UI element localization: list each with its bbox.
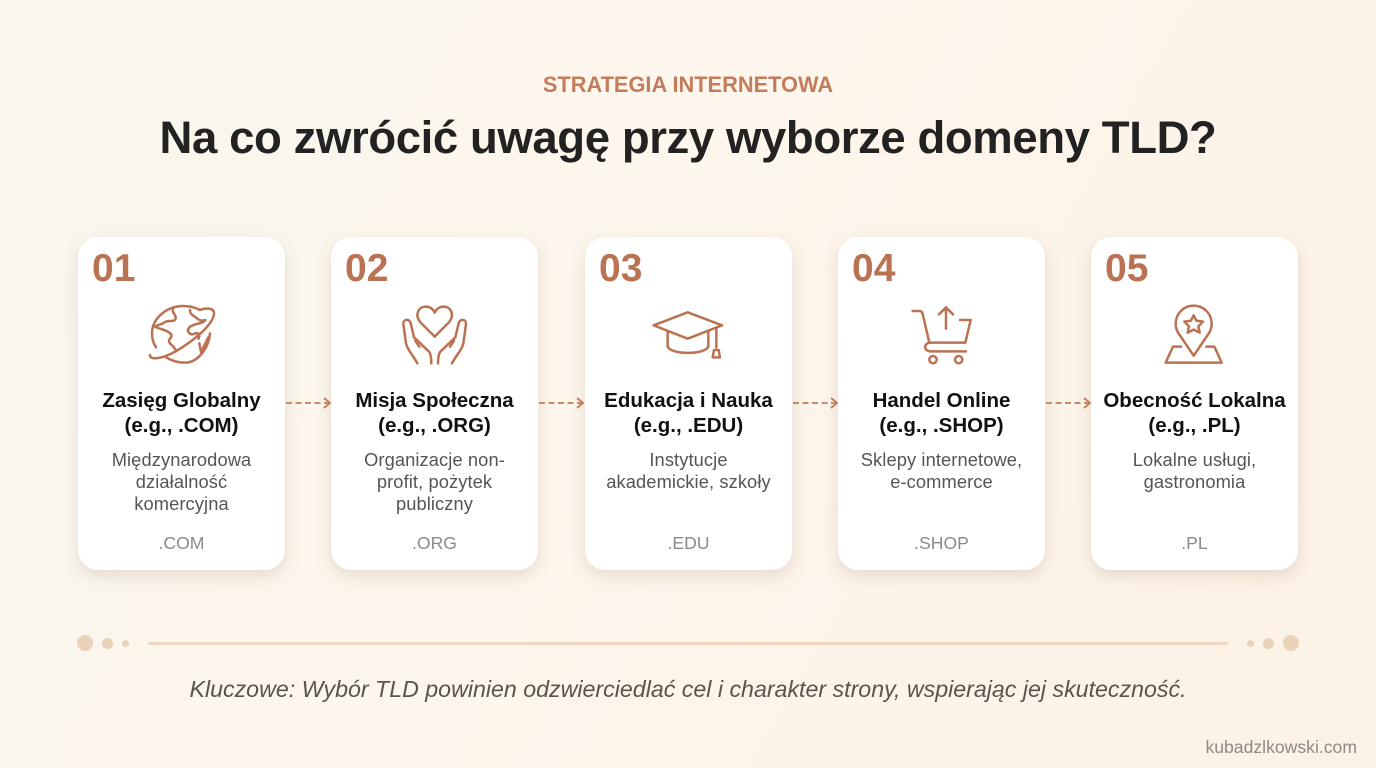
card description xyxy=(364,449,505,514)
card description xyxy=(112,449,252,514)
title: Na co zwrócić uwagę przy wyborze domeny TLD? xyxy=(160,112,1216,163)
panel: card 04 online trade xyxy=(838,237,1045,570)
icon: hands with heart xyxy=(402,305,468,365)
key takeaway text: Kluczowe: Wybór TLD powinien odzwierciedlać cel i charakter strony, wspierając jej skuteczność. xyxy=(189,676,1187,702)
eyebrow label: STRATEGIA INTERNETOWA xyxy=(543,72,833,97)
divider with dots xyxy=(77,635,1299,651)
card heading xyxy=(102,389,261,437)
domain label: .PL xyxy=(1181,533,1208,553)
icon: globe xyxy=(148,304,216,364)
panel: card 02 social mission xyxy=(331,237,538,570)
card heading: (e.g., .EDU) xyxy=(634,414,743,437)
number 01: 01 xyxy=(92,247,135,290)
card heading xyxy=(873,389,1010,437)
card description: profit, pożytek xyxy=(377,471,492,492)
card description: Międzynarodowa xyxy=(112,449,251,470)
website credit: kubadzlkowski.com xyxy=(1205,737,1357,757)
number 05: 05 xyxy=(1105,247,1148,290)
number 02: 02 xyxy=(345,247,388,290)
card description: Instytucje xyxy=(649,449,728,470)
card description: Organizacje non- xyxy=(364,449,505,470)
panel: card 05 local presence xyxy=(1091,237,1298,570)
number 04: 04 xyxy=(852,247,895,290)
card description: Lokalne usługi, xyxy=(1133,449,1256,470)
domain label: .SHOP xyxy=(914,533,969,553)
card heading xyxy=(1103,389,1286,437)
card description: gastronomia xyxy=(1144,471,1245,492)
card heading: Zasięg Globalny xyxy=(102,389,261,412)
card description xyxy=(861,449,1022,492)
card description: publiczny xyxy=(396,493,473,514)
card heading: Obecność Lokalna xyxy=(1103,389,1286,412)
panel: card 03 education xyxy=(585,237,792,570)
card description: akademickie, szkoły xyxy=(606,471,771,492)
card heading: (e.g., .ORG) xyxy=(378,414,491,437)
domain label: .COM xyxy=(159,533,204,553)
card heading: Misja Społeczna xyxy=(355,389,514,412)
card heading: (e.g., .PL) xyxy=(1148,414,1241,437)
domain label: .ORG xyxy=(412,533,457,553)
number 03: 03 xyxy=(599,247,642,290)
icon: shopping cart with arrow xyxy=(911,306,972,365)
card description xyxy=(1133,449,1256,492)
domain label: .EDU xyxy=(667,533,710,553)
card heading: Edukacja i Nauka xyxy=(604,389,773,412)
arrow: 04 to 05 xyxy=(1046,397,1091,409)
arrow: 03 to 04 xyxy=(793,397,838,409)
arrow: 01 to 02 xyxy=(286,397,331,409)
card heading: (e.g., .COM) xyxy=(125,414,238,437)
card heading: (e.g., .SHOP) xyxy=(879,414,1004,437)
card heading: Handel Online xyxy=(873,389,1010,412)
card description xyxy=(606,449,771,492)
card heading xyxy=(604,389,773,437)
arrow: 02 to 03 xyxy=(539,397,584,409)
card heading xyxy=(355,389,514,437)
card description: e-commerce xyxy=(890,471,993,492)
card description: komercyjna xyxy=(134,493,229,514)
panel: card 01 global reach xyxy=(78,237,285,570)
icon: map pin with star xyxy=(1164,304,1223,364)
icon: graduation cap xyxy=(652,311,724,359)
card description: Sklepy internetowe, xyxy=(861,449,1022,470)
card description: działalność xyxy=(136,471,227,492)
